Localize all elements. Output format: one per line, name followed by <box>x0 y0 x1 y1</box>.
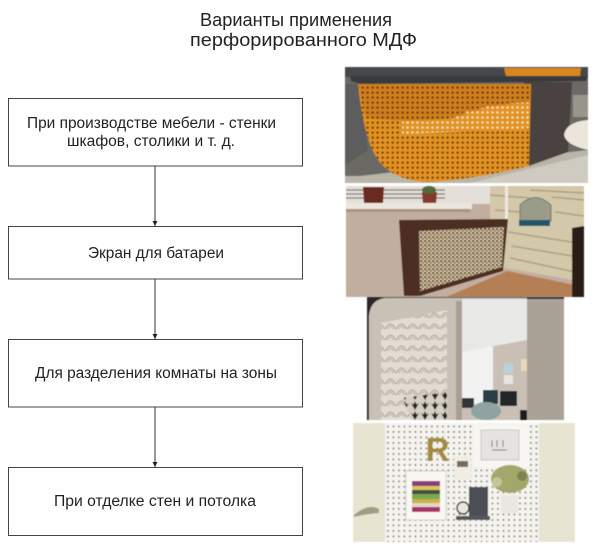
title: перфорированного МДФ <box>190 30 417 50</box>
step 1: furniture: шкафов, столики и т. д. <box>67 133 235 150</box>
photo: radiator screen <box>346 186 584 297</box>
step 1: furniture: При производстве мебели - стенки <box>27 115 276 132</box>
photo: pegboard wall decor <box>353 423 575 542</box>
step 2: radiator screen <box>8 226 302 279</box>
arrow: step 2 to step 3 <box>154 279 156 339</box>
step 3: room zoning: Для разделения комнаты на зоны <box>35 365 277 382</box>
photo: lattice room divider <box>367 297 564 420</box>
step 2: radiator screen: Экран для батареи <box>88 245 224 262</box>
arrow: step 3 to step 4 <box>154 407 156 467</box>
title <box>190 10 417 50</box>
photo: orange perforated reception desk <box>345 67 588 183</box>
arrow: step 1 to step 2 <box>154 166 156 226</box>
photo: pegboard wall decor: R <box>426 431 450 468</box>
step 4: wall and ceiling finishing: При отделке стен и потолка <box>54 493 256 510</box>
step 3: room zoning <box>8 340 302 407</box>
title: Варианты применения <box>200 10 392 30</box>
step 1: furniture <box>8 98 302 166</box>
step 4: wall and ceiling finishing <box>8 468 302 536</box>
